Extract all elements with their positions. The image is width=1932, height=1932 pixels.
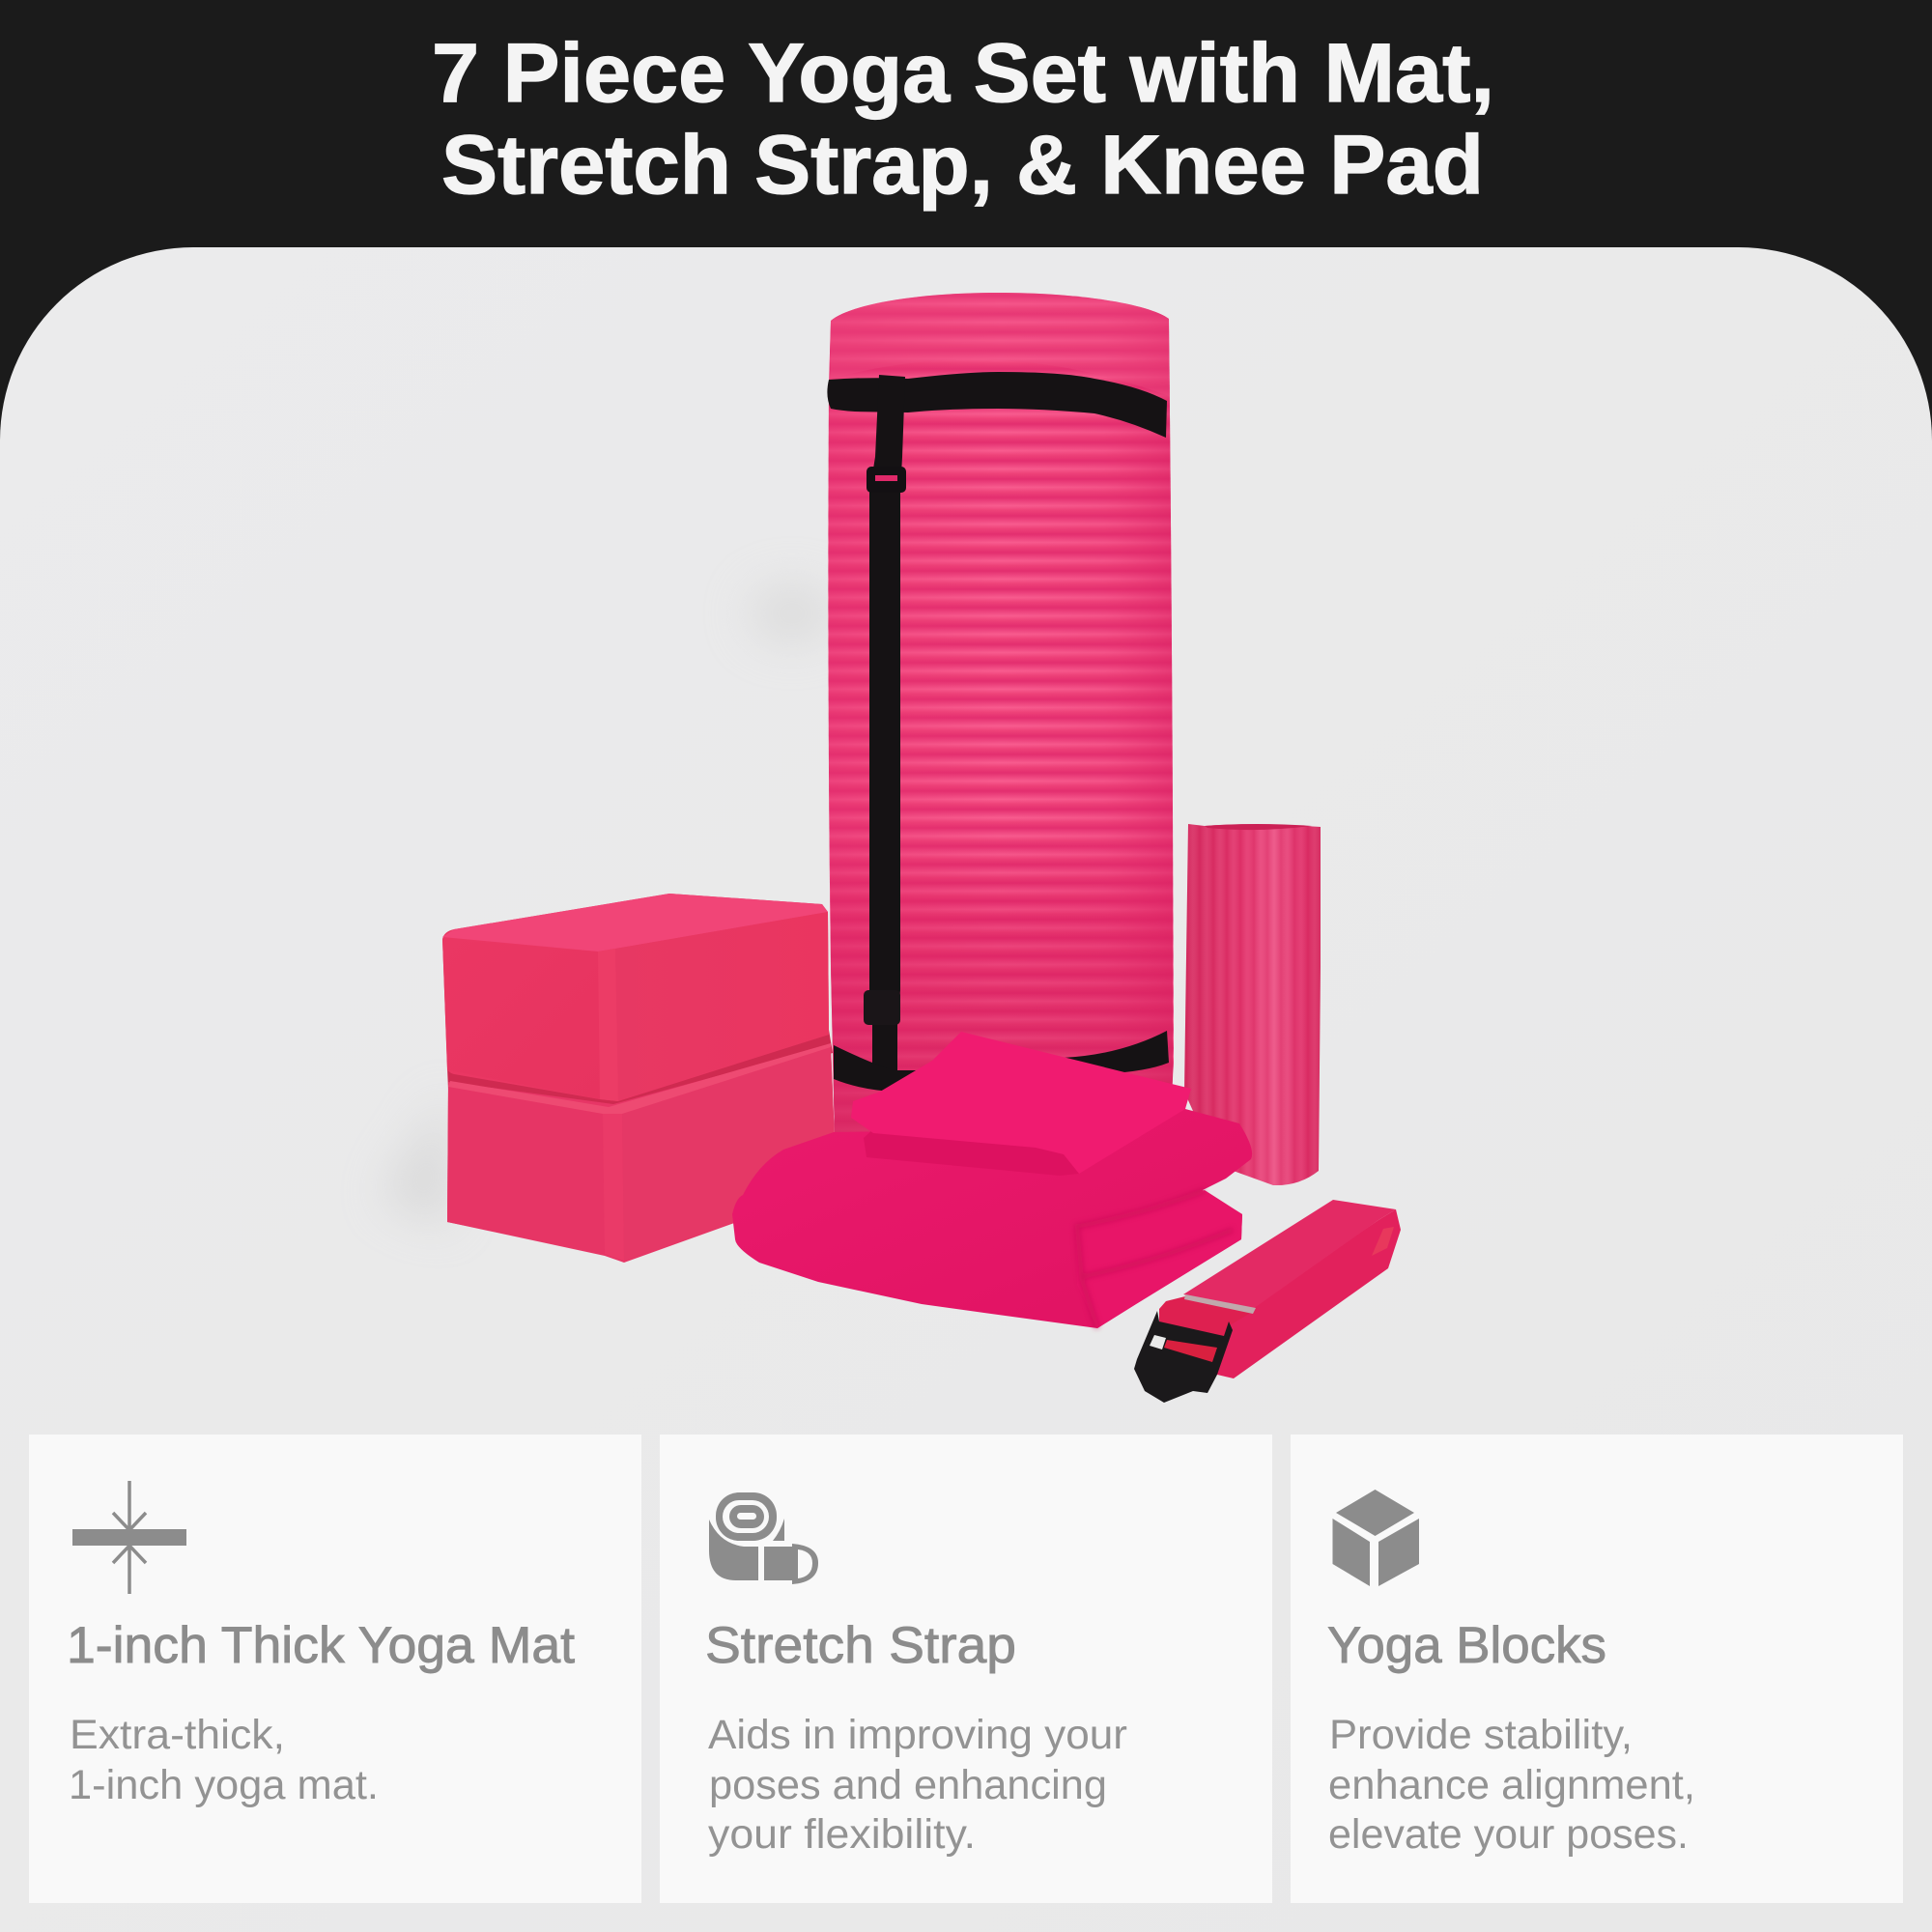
icon: cube [1333,1490,1419,1586]
neck band [1159,1296,1254,1352]
small towel lower fold [864,1128,1079,1176]
horizontal band top [827,372,1167,438]
panel: stretch strap [660,1435,1272,1903]
description [69,1712,379,1808]
description: Aids in improving your [708,1712,1127,1758]
heading: 1-inch Thick Yoga Mat [67,1617,575,1674]
title: Stretch Strap, & Knee Pad [441,119,1484,212]
header band [0,0,1932,444]
description: 1-inch yoga mat. [69,1762,379,1808]
metal slider [1184,1294,1256,1314]
panel: yoga blocks [1291,1435,1903,1903]
card background [29,1435,641,1903]
lower band right [1063,1031,1169,1074]
heading: Yoga Blocks [1327,1617,1606,1674]
buckle [1134,1311,1233,1403]
description: elevate your poses. [1328,1811,1689,1858]
card background [660,1435,1272,1903]
lower band left [834,1045,942,1092]
loops [1217,1209,1401,1378]
description: Provide stability, [1329,1712,1633,1758]
title [432,27,1494,212]
icon: rolled strap [709,1492,818,1584]
description [708,1712,1127,1858]
lower buckle [864,990,900,1025]
vertical strap [869,375,905,1087]
towels [732,1032,1252,1328]
yoga blocks [442,894,837,1263]
towel end folds [1075,1190,1242,1328]
stretch strap [1134,1200,1401,1403]
panel: 1-inch thick yoga mat [29,1435,641,1903]
large towel [732,1109,1252,1328]
seam between blocks [447,1030,833,1121]
soft shadows [382,584,836,1227]
small towel top [851,1032,1191,1174]
icon: thickness arrows [72,1481,186,1594]
product photo: yoga set [382,290,1401,1403]
title: 7 Piece Yoga Set with Mat, [432,27,1494,120]
description: your flexibility. [708,1811,976,1858]
description: Extra-thick, [70,1712,285,1758]
description [1328,1712,1695,1858]
heading: Stretch Strap [705,1617,1016,1674]
card background [1291,1435,1903,1903]
upper block [442,894,829,1101]
lower block [447,1045,837,1263]
upper band [1183,1200,1396,1309]
description: enhance alignment, [1328,1762,1695,1808]
knee pad [1184,824,1321,1185]
description: poses and enhancing [709,1762,1107,1808]
yoga mat roll [821,290,1179,1159]
strap slider [867,467,906,493]
